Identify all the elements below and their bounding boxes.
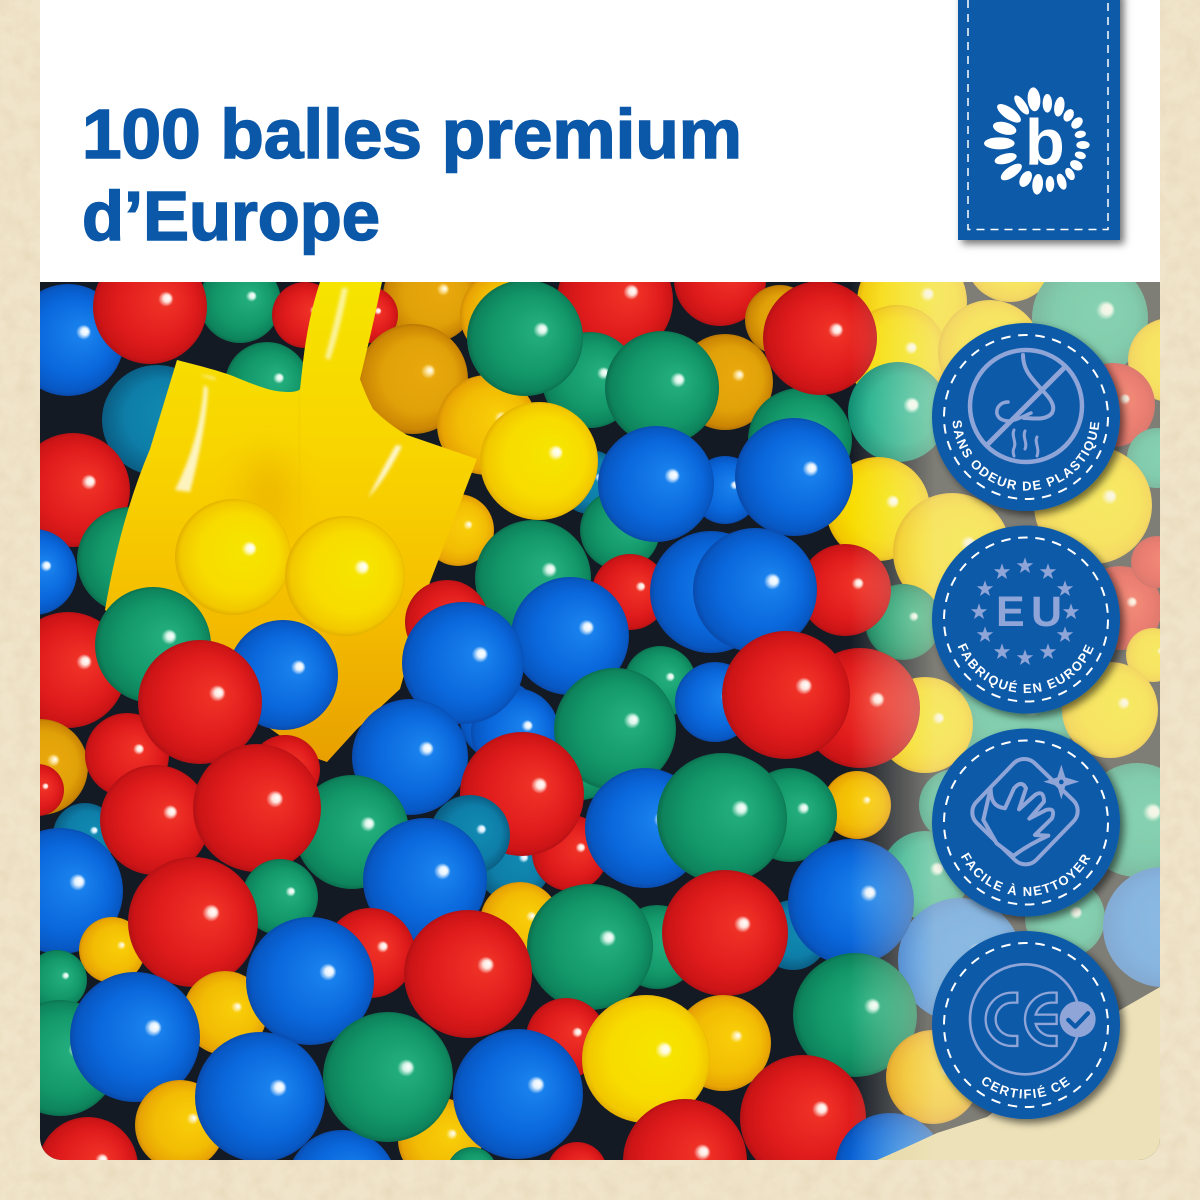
label: FACILE À NETTOYER [961,852,1090,896]
icon: EU stars: E [996,588,1025,636]
yellow shovel [105,282,477,762]
icon: hand wiping cloth [966,753,1084,871]
foreground balls [0,280,980,1200]
icon: crossed-out nose [970,350,1082,462]
badge: facile à nettoyer [930,727,1130,926]
badge: certifié CE [930,930,1130,1128]
title: d’Europe [82,177,380,255]
icon: CE mark with check [970,964,1096,1074]
back layer balls [40,282,852,989]
badge: fabriqué en Europe [930,524,1130,723]
icon: EU stars [971,557,1079,665]
logo: flower with b: b [1025,106,1065,178]
badge: sans odeur de plastique [930,321,1130,520]
title: 100 balles premium [82,95,742,173]
beige box corner [877,987,1160,1160]
brand tag with logo [958,0,1120,240]
logo: flower with b [984,87,1090,195]
label: CERTIFIÉ CE [982,1076,1070,1099]
label: SANS ODEUR DE PLASTIQUE [952,420,1100,491]
photo of coloured balls with shovel [40,282,1160,1160]
icon: EU stars: U [1031,588,1062,636]
light fade overlay on right side [850,282,1160,1160]
white header panel [40,0,1160,282]
right faded balls [828,282,1160,1016]
label: FABRIQUÉ EN EUROPE [958,643,1094,694]
title [82,95,742,255]
